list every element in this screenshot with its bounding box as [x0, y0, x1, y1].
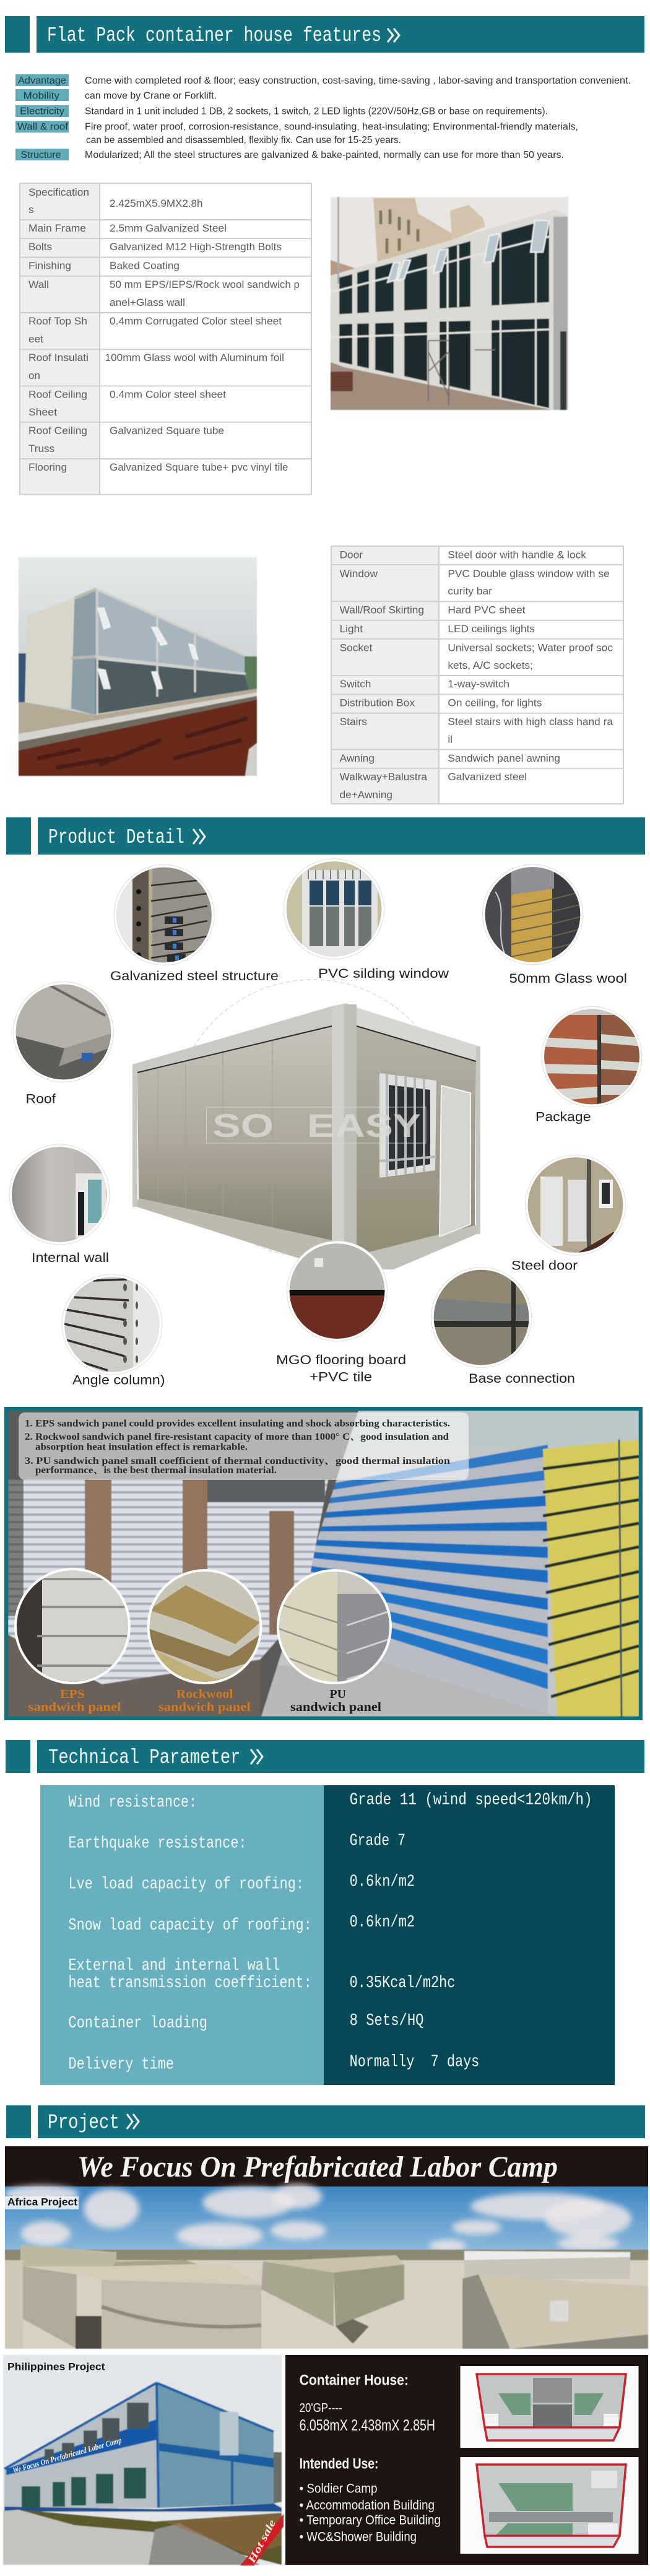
row: live load capacity: 0.6kn/m2: [350, 1873, 415, 1892]
barred window: [379, 1073, 436, 1178]
row: Specifications: [28, 186, 203, 215]
row: heat transmission coefficient: 0.35Kcal/m2hc: [350, 1974, 455, 1993]
row: Stairs: [340, 716, 613, 746]
list of intended uses: • WC&Shower Building: [300, 2530, 417, 2544]
banner: We Focus On Prefabricated Labor Camp: [5, 2146, 648, 2187]
photo: corrugated panels with brown stacks: [8, 1411, 358, 1717]
row: Roof Ceiling Truss: Galvanized Square tube: [110, 425, 224, 437]
feature: Advantage: Advantage: [18, 76, 66, 86]
left wall: [137, 1025, 332, 1240]
row: earthquake resistance: Grade 7: [350, 1832, 405, 1851]
row: container loading: [68, 2012, 423, 2033]
row: Wall: 50 mm EPS/IEPS/Rock wool sandwich p: [110, 279, 300, 290]
row: Walkway+Balustrade+Awning: de+Awning: [340, 789, 392, 801]
row: Walkway+Balustrade+Awning: Galvanized steel: [448, 771, 527, 783]
list of intended uses: [300, 2482, 441, 2544]
panel: sandwich panel types: [4, 1407, 643, 1720]
right wall: [357, 1025, 476, 1257]
row: Light: LED ceilings lights: [448, 623, 535, 635]
label: EPS sandwich panel: [28, 1687, 121, 1714]
row: Awning: [340, 752, 560, 764]
row: Wall: anel+Glass wall: [110, 297, 185, 308]
row: Specifications: s: [28, 204, 33, 215]
feature list: [15, 74, 631, 160]
row: Bolts: [28, 241, 282, 253]
label: Internal wall: Internal wall: [32, 1251, 109, 1265]
row: Walkway+Balustrade+Awning: Walkway+Balustra: [340, 771, 428, 783]
circle: EPS panel sample: [14, 1569, 131, 1684]
decorative dashed orbit around container: [174, 980, 451, 1257]
row: Switch: [340, 678, 509, 690]
row: Window: [340, 568, 610, 597]
floor plan: three-room layout: [461, 2366, 639, 2448]
feature: Mobility: Mobility: [24, 90, 59, 102]
row: Main Frame: [28, 222, 227, 234]
row: Window: Window: [340, 568, 378, 580]
translucent text box: performance、is the best thermal insulation material.: [35, 1465, 277, 1476]
technical parameter table: [40, 1785, 615, 2085]
row: Finishing: [28, 260, 180, 272]
list of intended uses: • Soldier Camp: [300, 2482, 378, 2496]
row: Door: Door: [340, 549, 363, 560]
row: Window: PVC Double glass window with se: [448, 568, 610, 580]
row: Main Frame: Main Frame: [28, 222, 86, 234]
label: Rockwool sandwich panel: Rockwool: [176, 1687, 233, 1701]
label: Angle column: Angle column): [72, 1373, 165, 1388]
section header: Project: [6, 2105, 645, 2138]
corner post: [332, 1003, 357, 1273]
icon: double chevron: [251, 1749, 262, 1764]
row: Specifications: Specification: [28, 186, 89, 198]
feature: Electricity: Standard in 1 unit included 1 DB, 2 sockets, 1 switch, 2 LED lights (220V/50Hz,GB or base on requirements).: [85, 107, 548, 116]
row: Switch: 1-way-switch: [448, 678, 509, 690]
row: container loading: Container loading: [68, 2014, 207, 2033]
row: delivery time: Delivery time: [68, 2056, 174, 2074]
banner: We Focus On Prefabricated Labor Camp: We Focus On Prefabricated Labor Camp: [77, 2151, 558, 2183]
row: Roof Ceiling Sheet: [28, 389, 226, 418]
heading: Intended Use: Intended Use:: [300, 2456, 379, 2473]
label: EPS sandwich panel: EPS: [60, 1687, 85, 1701]
detail circle: base connection: [431, 1267, 532, 1368]
row: Main Frame: 2.5mm Galvanized Steel: [110, 222, 227, 234]
roof edge beams: [132, 1006, 332, 1073]
translucent text box: absorption heat insulation effect is remarkable.: [35, 1442, 248, 1452]
heading text: Technical Parameter: [48, 1746, 240, 1769]
detail circle: package: [542, 1006, 643, 1107]
feature: Wall and roof: [15, 121, 578, 146]
row: Roof Top Sheet: 0.4mm Corrugated Color steel sheet: [110, 315, 282, 327]
row: Roof Insulation: 100mm Glass wool with Aluminum foil: [105, 352, 284, 363]
watermark: SO EASY: [207, 1107, 426, 1144]
feature: Mobility: can move by Crane or Forklift.: [85, 90, 217, 102]
row: Bolts: Galvanized M12 High-Strength Bolts: [110, 241, 282, 253]
row: heat transmission coefficient: External and internal wall: [68, 1957, 280, 1975]
row: Distribution Box: [340, 697, 542, 709]
row: Walkway+Balustrade+Awning: [340, 771, 527, 801]
row: delivery time: [68, 2053, 479, 2074]
feature: Structure: Modularized; All the steel structures are galvanized & bake-painted, normally can use for more than 50 years.: [85, 150, 564, 160]
row: Flooring: Flooring: [28, 461, 67, 473]
dimensions text: 6.058mX 2.438mX 2.85H: [300, 2417, 435, 2434]
label: Roof: Roof: [26, 1092, 56, 1107]
row: Roof Ceiling Truss: Roof Ceiling: [28, 425, 87, 437]
row: heat transmission coefficient: heat transmission coefficient:: [68, 1974, 312, 1993]
heading text: Product Detail: [48, 826, 184, 849]
heading text: Project: [48, 2112, 119, 2134]
section header: Product Detail: [6, 817, 645, 855]
row: earthquake resistance: [68, 1832, 405, 1853]
row: wind resistance: [68, 1791, 592, 1812]
row: Finishing: Finishing: [28, 260, 71, 272]
row: Stairs: il: [448, 734, 453, 746]
dimensions text: 20'GP----: [300, 2401, 342, 2415]
main image: flat pack container unit: [132, 1003, 480, 1273]
row: Roof Ceiling Sheet: Roof Ceiling: [28, 389, 87, 400]
feature: Wall and roof: can be assembled and disassembled, flexibly fix. Can use for 15-25 years.: [86, 135, 401, 146]
row: Roof Ceiling Truss: Truss: [28, 443, 54, 455]
label: 50mm Glass wool: 50mm Glass wool: [509, 972, 627, 986]
translucent text box: [19, 1412, 469, 1480]
label: MGO flooring board +PVC tile: MGO flooring board: [276, 1353, 406, 1367]
circle: Rockwool panel sample: [147, 1569, 262, 1684]
list of intended uses: • Temporary Office Building: [300, 2513, 441, 2528]
row: Flooring: [28, 461, 288, 473]
row: Socket: kets, A/C sockets;: [448, 659, 533, 671]
row: Distribution Box: On ceiling, for lights: [448, 697, 542, 709]
detail circle: MGO flooring board: [287, 1240, 388, 1342]
row: container loading: 8 Sets/HQ: [350, 2012, 423, 2030]
equipment table: [331, 546, 623, 804]
row: Roof Insulation: Roof Insulati: [28, 352, 89, 363]
row: Switch: Switch: [340, 678, 371, 690]
row: Flooring: Galvanized Square tube+ pvc vinyl tile: [110, 461, 288, 473]
row: Roof Ceiling Sheet: Sheet: [28, 406, 57, 418]
steel door: [440, 1086, 470, 1237]
label: PU sandwich panel: PU: [329, 1687, 346, 1701]
detail circle: angle column: [61, 1274, 163, 1375]
label: PU sandwich panel: sandwich panel: [290, 1700, 381, 1714]
detail circle: steel door: [525, 1155, 626, 1256]
row: snow load capacity: 0.6kn/m2: [350, 1913, 415, 1932]
row: live load capacity: Lve load capacity of roofing:: [68, 1876, 304, 1894]
banner text on building: We Focus On Prefabricated Labor Camp: [12, 2435, 123, 2475]
row: earthquake resistance: Earthquake resistance:: [68, 1835, 246, 1853]
watermark: SO EASY: SO: [212, 1108, 274, 1144]
detail circle: PVC sliding window: [284, 859, 384, 959]
label: Steel door: Steel door: [511, 1259, 578, 1273]
label: MGO flooring board +PVC tile: [276, 1353, 406, 1385]
feature: Wall and roof: Fire proof, water proof, corrosion-resistance, sound-insulating, heat-insulating; Environmental-friendly materials,: [85, 121, 578, 133]
detail circle: galvanized steel structure: [114, 864, 214, 965]
feature: Advantage: Come with completed roof & floor; easy construction, cost-saving, time-saving , labor-saving and transportation convenient.: [85, 76, 631, 86]
label: PVC silding window: PVC silding window: [318, 967, 449, 981]
row: Roof Insulation: on: [28, 370, 40, 381]
section header: Technical Parameter: [6, 1740, 644, 1773]
label: EPS sandwich panel: sandwich panel: [28, 1700, 121, 1714]
translucent text box: 2. Rockwool sandwich panel fire-resistant capacity of more than 1000° C、good insulation and: [25, 1432, 449, 1442]
base beams: [135, 1198, 332, 1273]
label: Rockwool sandwich panel: [158, 1687, 251, 1714]
heading text: Flat Pack container house features: [47, 24, 381, 47]
heading: Container House: Container House:: [300, 2372, 409, 2389]
detail circle: roof: [13, 981, 114, 1082]
detail circle: internal wall: [9, 1144, 110, 1245]
row: Wall/Roof Skirting: Hard PVC sheet: [448, 604, 526, 616]
row: Door: Steel door with handle & lock: [448, 549, 587, 560]
row: Awning: Awning: [340, 752, 375, 764]
icon: double chevron: [127, 2114, 139, 2129]
label: Package: Package: [535, 1110, 591, 1125]
row: heat transmission coefficient: [68, 1957, 455, 1993]
row: snow load capacity: Snow load capacity of roofing:: [68, 1917, 312, 1935]
row: Roof Top Sheet: [28, 315, 282, 345]
row: Stairs: Steel stairs with high class hand ra: [448, 716, 613, 728]
row: Bolts: Bolts: [28, 241, 52, 253]
row: Socket: Universal sockets; Water proof soc: [448, 642, 613, 653]
row: Stairs: Stairs: [340, 716, 367, 728]
row: Roof Ceiling Sheet: 0.4mm Color steel sheet: [110, 389, 226, 400]
row: wind resistance: Wind resistance:: [68, 1793, 197, 1812]
row: Door: [340, 549, 587, 560]
icon: double chevron: [388, 28, 399, 42]
label: Philippines Project: Philippines Project: [7, 2361, 105, 2373]
translucent text box: 3. PU sandwich panel small coefficient of thermal conductivity、good thermal insulation: [25, 1456, 450, 1466]
label: Galvanized steel structure: Galvanized steel structure: [110, 969, 279, 983]
label: Base connection: Base connection: [469, 1372, 575, 1386]
icon: double chevron: [193, 829, 205, 844]
label: MGO flooring board +PVC tile: +PVC tile: [310, 1370, 372, 1385]
row: Roof Top Sheet: eet: [28, 333, 43, 345]
label: PU sandwich panel: [290, 1687, 381, 1714]
section header: Flat Pack container house features: [5, 16, 644, 53]
row: Wall: [28, 279, 300, 308]
label: Africa Project: Africa Project: [7, 2196, 77, 2208]
feature: Electricity: Electricity: [20, 107, 64, 116]
list of intended uses: • Accommodation Building: [300, 2499, 435, 2513]
translucent text box: 1. EPS sandwich panel could provides excellent insulating and shock absorbing characteristics.: [25, 1418, 450, 1429]
ribbon: Hot sale: Hot sale: [245, 2517, 278, 2565]
detail circle: 50mm glass wool panel: [483, 864, 583, 965]
row: Window: curity bar: [448, 585, 492, 597]
row: Light: Light: [340, 623, 363, 635]
row: Distribution Box: Distribution Box: [340, 697, 415, 709]
dimensions text: [300, 2401, 435, 2434]
row: delivery time: Normally 7 days: [350, 2053, 479, 2072]
row: Wall/Roof Skirting: Wall/Roof Skirting: [340, 604, 424, 616]
row: Socket: Socket: [340, 642, 373, 653]
photo: two-storey glazed container building with tower behind: [331, 197, 568, 410]
watermark: SO EASY: EASY: [307, 1108, 421, 1144]
row: Finishing: Baked Coating: [110, 260, 180, 272]
row: Light: [340, 623, 535, 635]
row: Socket: [340, 642, 613, 671]
row: Wall: Wall: [28, 279, 49, 290]
photo: stacked blue and yellow panels: [8, 1411, 639, 1717]
photo: Philippines project: [3, 2355, 284, 2565]
panel: container house information: [285, 2355, 648, 2565]
row: Roof Top Sheet: Roof Top Sh: [28, 315, 87, 327]
ribbon: Hot sale: [240, 2514, 284, 2565]
feature: Mobility: [15, 89, 217, 102]
circle: PU panel sample: [277, 1569, 393, 1684]
row: Specifications: 2.425mX5.9MX2.8h: [110, 198, 203, 209]
photo: long two-storey container building with red soil foreground: [19, 557, 257, 776]
row: Roof Ceiling Truss: [28, 425, 224, 455]
row: wind resistance: Grade 11 (wind speed<120km/h): [350, 1791, 592, 1810]
row: Wall/Roof Skirting: [340, 604, 526, 616]
specification table: [20, 183, 311, 495]
feature: Structure: Structure: [21, 150, 61, 160]
floor plan: open layout: [461, 2457, 639, 2554]
feature: Wall and roof: Wall & roof: [17, 121, 69, 133]
photo: Africa project panorama: [4, 2184, 648, 2349]
label: Rockwool sandwich panel: sandwich panel: [158, 1700, 251, 1714]
row: Roof Insulation: [28, 352, 284, 381]
row: Awning: Sandwich panel awning: [448, 752, 560, 764]
